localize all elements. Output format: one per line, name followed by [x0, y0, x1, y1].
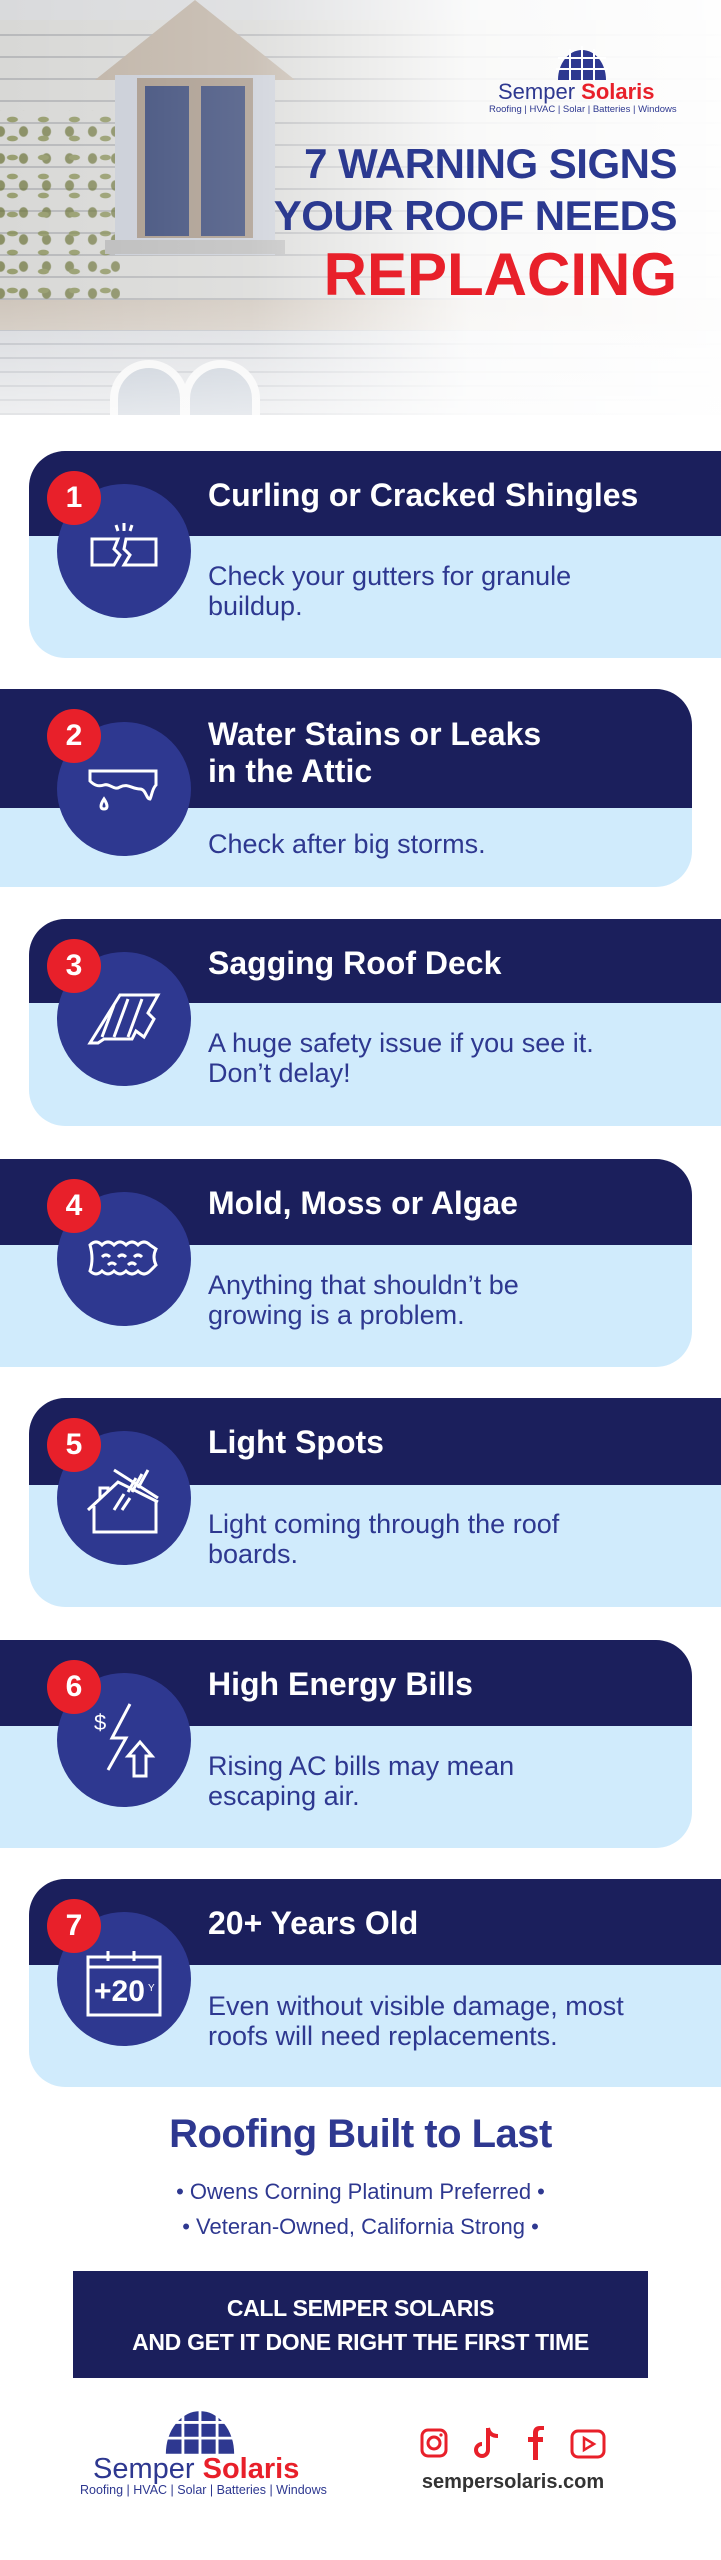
text block: bullets: • Owens Corning Platinum Preferred • [176, 2179, 545, 2204]
text: A huge safety issue if you see it. [208, 1028, 594, 1058]
icon: calendar 20: Y [148, 1983, 155, 1994]
icon: youtube [570, 2430, 606, 2458]
white fade overlay [0, 0, 721, 415]
arched windows [110, 360, 260, 415]
icon: globe [166, 2411, 234, 2454]
social icons [420, 2426, 606, 2460]
title: REPLACING [324, 241, 677, 308]
heading: in the Attic [208, 753, 372, 789]
text [208, 1751, 514, 1811]
siding [0, 330, 721, 415]
panel: card 1 [29, 451, 721, 658]
title: YOUR ROOF NEEDS [274, 192, 677, 239]
badge 5 [47, 1418, 101, 1472]
panel: card 3 [29, 919, 721, 1126]
icon: cracked shingle [57, 484, 191, 618]
text [208, 1991, 624, 2051]
logo: top [489, 50, 677, 115]
roof shingles [0, 20, 721, 300]
logo text: Semper Solaris [93, 2453, 299, 2485]
panel: card 4 [0, 1159, 692, 1367]
icon: facebook [528, 2426, 544, 2460]
icon: moss [57, 1192, 191, 1326]
text: Rising AC bills may mean [208, 1751, 514, 1781]
text: Anything that shouldn’t be [208, 1270, 519, 1300]
callout: CTA: CALL SEMPER SOLARIS [227, 2295, 494, 2321]
badge 1 [47, 471, 101, 525]
text: escaping air. [208, 1781, 360, 1811]
callout: CTA [73, 2271, 648, 2378]
panel: card 5 [29, 1398, 721, 1607]
title [274, 140, 677, 308]
badge 5: 5 [66, 1428, 82, 1461]
text [208, 1509, 560, 1569]
text [208, 561, 571, 621]
icon: energy bill [57, 1673, 191, 1807]
text: Check after big storms. [208, 829, 486, 859]
badge 3: 3 [66, 949, 82, 982]
text: growing is a problem. [208, 1300, 465, 1330]
icon: house light [57, 1431, 191, 1565]
tagline: Roofing | HVAC | Solar | Batteries | Windows [80, 2483, 327, 2497]
text: boards. [208, 1539, 298, 1569]
heading: Roofing Built to Last: Roofing Built to Last [169, 2112, 552, 2156]
icon: energy bill: $ [94, 1710, 106, 1735]
badge 6: 6 [66, 1670, 82, 1703]
icon: globe [558, 50, 606, 80]
badge 6 [47, 1660, 101, 1714]
text [208, 1028, 594, 1088]
heading: 20+ Years Old [208, 1905, 418, 1941]
tagline: Roofing | HVAC | Solar | Batteries | Windows [489, 104, 677, 115]
panel: card 7 [29, 1879, 721, 2087]
title: 7 WARNING SIGNS [304, 140, 677, 187]
icon: instagram [420, 2428, 448, 2458]
text: roofs will need replacements. [208, 2021, 558, 2051]
heading: Curling or Cracked Shingles [208, 477, 638, 513]
heading [208, 716, 541, 789]
logo text: Semper Solaris [498, 79, 655, 104]
badge 2 [47, 709, 101, 763]
heading: High Energy Bills [208, 1666, 473, 1702]
badge 7: 7 [66, 1909, 82, 1942]
badge 1: 1 [66, 481, 82, 514]
icon: roof deck [57, 952, 191, 1086]
text block: bullets: • Veteran-Owned, California Strong • [182, 2214, 539, 2239]
text block: bullets [176, 2179, 545, 2239]
badge 3 [47, 939, 101, 993]
heading: Water Stains or Leaks [208, 716, 541, 752]
moss [0, 110, 120, 300]
badge 4: 4 [66, 1189, 82, 1222]
website: sempersolaris.com [422, 2471, 604, 2493]
dormer [96, 0, 294, 255]
icon: calendar 20: +20 [94, 1975, 145, 2008]
panel: card 2 [0, 689, 692, 887]
heading: Sagging Roof Deck [208, 945, 501, 981]
badge 2: 2 [66, 719, 82, 752]
badge 7 [47, 1899, 101, 1953]
callout: CTA: AND GET IT DONE RIGHT THE FIRST TIME [132, 2329, 589, 2355]
heading: Light Spots [208, 1424, 384, 1460]
logo: footer [80, 2411, 327, 2497]
panel: card 6 [0, 1640, 692, 1848]
text: Even without visible damage, most [208, 1991, 624, 2021]
badge 4 [47, 1179, 101, 1233]
icon: tiktok [474, 2428, 498, 2458]
icon: calendar 20 [57, 1912, 191, 2046]
text: Check your gutters for granule [208, 561, 571, 591]
text: Don’t delay! [208, 1058, 351, 1088]
header photo [0, 0, 721, 415]
icon: water leak [57, 722, 191, 856]
text [208, 1270, 519, 1330]
heading: Mold, Moss or Algae [208, 1185, 518, 1221]
eave [0, 300, 721, 330]
text: Light coming through the roof [208, 1509, 559, 1539]
text: buildup. [208, 591, 303, 621]
